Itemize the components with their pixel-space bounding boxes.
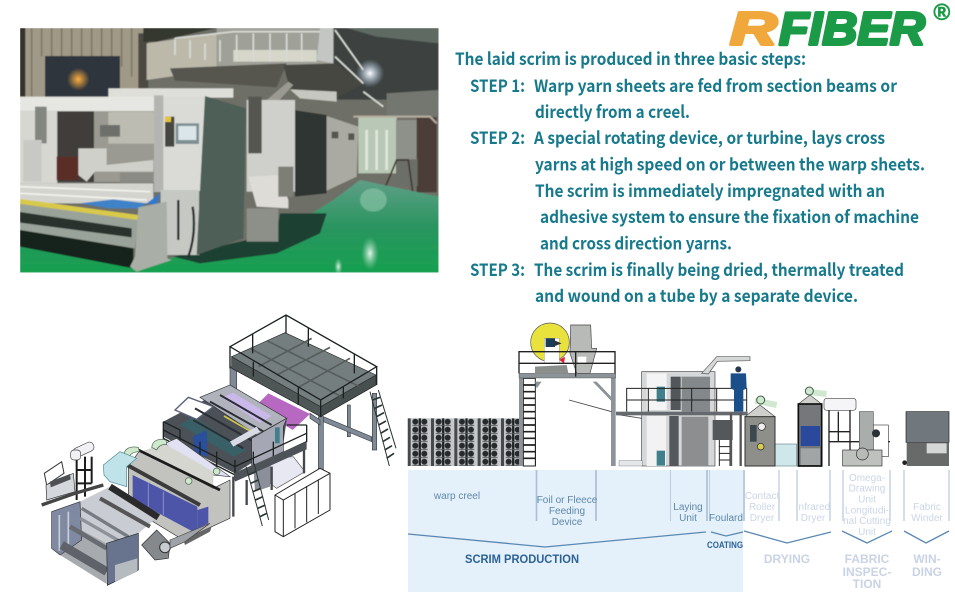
heading: winding: DING <box>912 565 942 579</box>
step 1: directly from a creel. <box>535 98 690 123</box>
photo: upper wall and ceiling <box>142 28 439 100</box>
elevation: infrared dryer <box>798 387 827 466</box>
elevation: turbine mount <box>519 325 615 377</box>
step 2: yarns at high speed on or between the warp sheets. <box>535 150 925 176</box>
iso: balcony railing <box>163 422 307 482</box>
label: infrared dryer: Dryer <box>801 513 826 524</box>
iso: elevated platform deck <box>230 315 377 417</box>
label: omega drawing and longitudinal cutting unit: Longitudi- <box>845 506 889 516</box>
iso: green ventilation ducts <box>123 439 220 484</box>
label: contact roller dryer: Contact <box>745 491 779 502</box>
step 2: and cross direction yarns. <box>540 230 732 254</box>
label: warp creel: warp creel <box>433 491 480 502</box>
elevation: fabric winder <box>902 412 949 466</box>
step 2: The scrim is immediately impregnated with an <box>535 177 885 202</box>
step 2 <box>470 124 925 254</box>
heading: coating: COATING <box>707 540 743 550</box>
iso: platform legs <box>230 367 377 470</box>
elevation: warp creel <box>408 418 536 466</box>
step 3: The scrim is finally being dried, thermally treated <box>534 256 904 281</box>
logo: RFIBER: FIBER <box>779 2 925 54</box>
label: laying unit: Unit <box>679 513 697 524</box>
label: contact roller dryer: Dryer <box>750 513 775 524</box>
elevation: impregnation and laying unit <box>616 357 750 466</box>
step 2: STEP 2: <box>470 124 525 149</box>
iso: right stairs <box>370 390 396 466</box>
label: omega drawing and longitudinal cutting unit: nal Cutting <box>843 516 891 527</box>
iso: laying unit top frame <box>175 385 287 467</box>
iso: cyan tank <box>103 452 137 487</box>
isometric 3D drawing of the production line <box>42 315 396 585</box>
label: omega drawing and longitudinal cutting unit: Unit <box>858 494 876 506</box>
elevation: contact roller dryer <box>745 396 777 466</box>
heading: fabric inspection: FABRIC <box>845 552 890 566</box>
heading: scrim production: SCRIM PRODUCTION <box>465 552 579 566</box>
step 1 <box>470 72 898 123</box>
panel: pale blue scrim production background <box>408 470 743 592</box>
elevation: yarn lines <box>569 400 642 418</box>
elevation: operator figure <box>731 366 747 412</box>
step 3 <box>470 256 904 307</box>
heading: fabric inspection: TION <box>853 577 881 591</box>
label: fabric winder: Fabric <box>913 502 941 513</box>
iso: lower housing under balcony <box>233 442 307 517</box>
logo: RFIBER: R <box>730 2 777 54</box>
label: foil or fleece feeding device: Feeding <box>549 506 585 517</box>
iso: laying unit interior <box>163 387 287 473</box>
step 3: and wound on a tube by a separate device. <box>535 282 858 307</box>
label: omega drawing and longitudinal cutting unit: Unit <box>858 527 876 538</box>
heading: fabric inspection: INSPEC- <box>843 565 891 579</box>
logo: RFIBER <box>730 0 950 54</box>
label: omega drawing and longitudinal cutting unit: Drawing <box>849 484 885 494</box>
step 2: adhesive system to ensure the fixation of machine <box>540 203 919 228</box>
braces <box>408 531 949 547</box>
photo: grey end frame <box>130 202 172 272</box>
elevation: yellow turbine disc <box>531 323 569 362</box>
label: foil or fleece feeding device: Device <box>552 517 583 528</box>
process labels and dividers <box>408 470 949 591</box>
step 2: A special rotating device, or turbine, lays cross <box>533 124 885 149</box>
label: infrared dryer: Infrared <box>796 502 830 513</box>
photo: middle machine housing <box>247 97 295 242</box>
photo: white machine top and guarding <box>20 88 233 183</box>
side elevation drawing: creel, tower and laying unit <box>408 323 750 466</box>
photo: control cabinet with touch screen <box>154 95 205 257</box>
photo: dark green cabinet door <box>197 96 246 255</box>
photo: floor <box>20 180 439 273</box>
iso: pink fabric web <box>255 393 310 430</box>
photo: distant machine and creel <box>293 110 437 197</box>
label: contact roller dryer: Roller <box>749 502 776 513</box>
step 1: STEP 1: <box>470 72 525 97</box>
iso: front ladder <box>246 463 269 526</box>
side elevation drawing: dryers, cutting unit and winder <box>731 387 949 466</box>
iso: electrical cabinets <box>275 468 330 537</box>
photo: scrim production line in factory <box>20 28 439 275</box>
label: laying unit: Laying <box>673 502 703 513</box>
label: foulard: Foulard <box>709 513 743 524</box>
heading: drying: DRYING <box>764 552 810 566</box>
photo: window with orange light <box>45 56 120 98</box>
heading: winding: WIN- <box>913 552 941 566</box>
elevation: omega drawing and cutting unit <box>824 398 890 466</box>
photo: winding table with yellow edge <box>20 183 160 268</box>
step 3: STEP 3: <box>470 256 525 281</box>
iso: piping and boiler unit <box>44 441 95 500</box>
step 1: Warp yarn sheets are fed from section beams or <box>534 72 898 97</box>
label: omega drawing and longitudinal cutting unit: Omega- <box>849 473 885 484</box>
photo: dark drum and gantry <box>170 28 383 107</box>
photo: factory wall <box>20 28 148 100</box>
iso: drying unit with blue panels <box>115 438 230 545</box>
elevation: tower and stairs <box>519 373 616 466</box>
elevation: cyan connection box <box>775 444 797 466</box>
elevation: foulard legs <box>731 413 741 466</box>
label: foil or fleece feeding device: Foil or Fleece <box>537 495 598 506</box>
intro sentence: The laid scrim is produced in three basic steps: <box>455 45 806 70</box>
iso: winder front unit <box>42 485 210 585</box>
text block: three basic steps <box>455 45 925 307</box>
label: fabric winder: Winder <box>911 513 944 524</box>
divider lines <box>536 470 949 521</box>
